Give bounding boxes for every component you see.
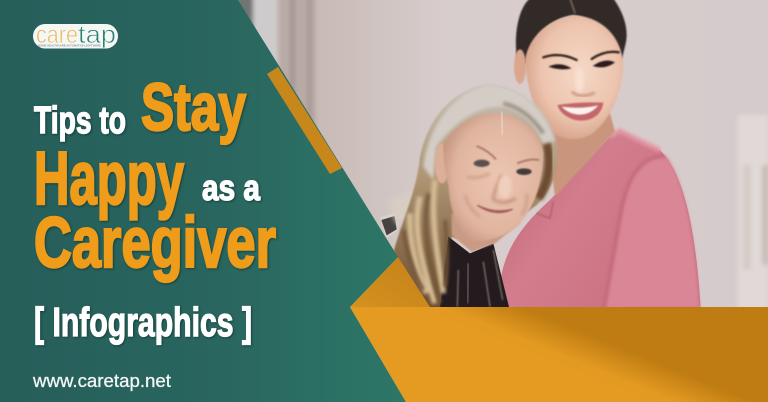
orange bottom band bbox=[350, 307, 768, 402]
title: Caregiver bbox=[34, 204, 276, 283]
elder hair bbox=[394, 84, 558, 308]
nurse face bbox=[525, 15, 623, 139]
title: Happy bbox=[34, 136, 184, 220]
elder grey crown bbox=[423, 85, 555, 180]
title bbox=[34, 70, 276, 283]
nurse hair bbox=[516, 0, 627, 63]
shelf at right bbox=[738, 115, 768, 310]
elder brows bbox=[477, 146, 539, 163]
logo bbox=[33, 21, 118, 49]
elder face bbox=[443, 113, 543, 241]
title: as a bbox=[202, 167, 261, 208]
title: Stay bbox=[141, 70, 246, 145]
elder wrinkles bbox=[465, 173, 527, 217]
elder eyes bbox=[474, 160, 490, 167]
curtain bbox=[236, 0, 316, 225]
nurse scrubs bbox=[498, 113, 701, 308]
logo: tap bbox=[78, 21, 116, 49]
logo: care bbox=[36, 21, 78, 49]
logo: HOME HEALTHCARE AUTOMATION SOFTWARE bbox=[38, 44, 101, 48]
elder flyaway hair bbox=[388, 190, 420, 223]
nurse mouth bbox=[557, 102, 603, 121]
orange diagonal bar bbox=[267, 67, 342, 174]
elder nose bbox=[493, 175, 516, 202]
nurse eyes bbox=[548, 60, 615, 69]
nurse ear bbox=[514, 49, 526, 84]
elder forehead strand bbox=[500, 112, 505, 135]
nurse head bbox=[514, 0, 627, 139]
elder mouth bbox=[477, 205, 513, 213]
photo: caregiver hugging elderly woman bbox=[230, 0, 768, 310]
elder blouse bbox=[440, 237, 509, 308]
title: Tips to bbox=[34, 100, 126, 142]
elder strands bbox=[410, 180, 443, 303]
subtitle: [ Infographics ] bbox=[34, 299, 252, 345]
nurse nose bbox=[572, 92, 595, 96]
nurse neck bbox=[543, 113, 615, 197]
website url: www.caretap.net bbox=[32, 371, 171, 391]
panel: green background bbox=[0, 0, 406, 402]
orange triangle behind panel bbox=[350, 257, 430, 307]
elderly woman bbox=[380, 84, 558, 308]
nurse brows bbox=[543, 52, 619, 60]
picture frame bbox=[380, 213, 399, 238]
elder ear bbox=[435, 143, 449, 183]
elder neck bbox=[452, 213, 520, 252]
